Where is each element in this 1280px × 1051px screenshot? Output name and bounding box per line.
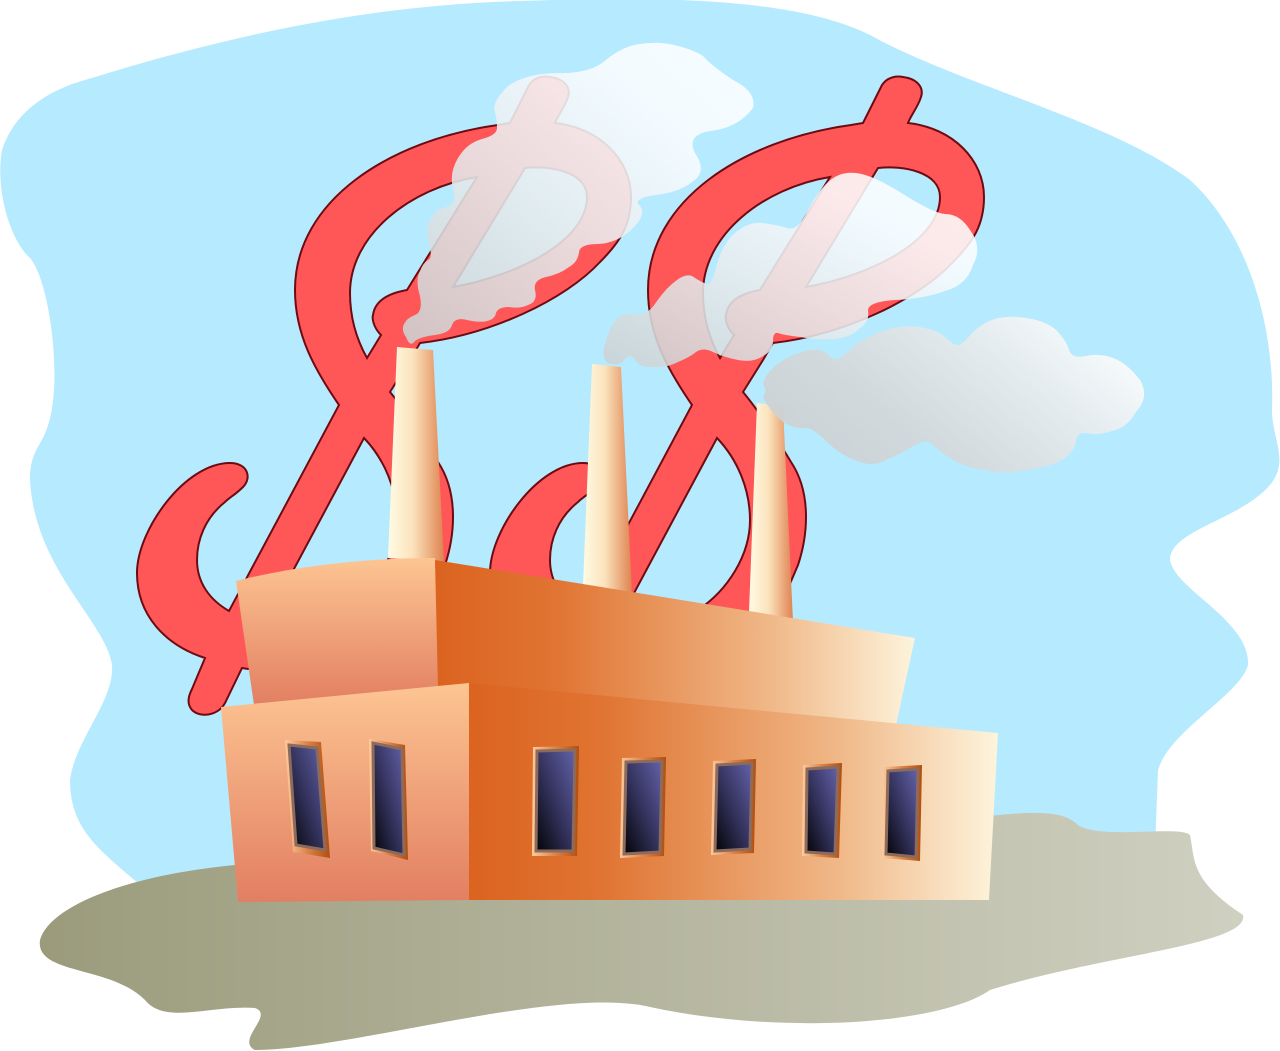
lower block: front	[221, 683, 469, 902]
upper block: front	[236, 558, 440, 705]
dollar sign: left	[137, 77, 631, 715]
smoke cloud: middle	[604, 173, 977, 367]
upper block: side	[435, 560, 915, 725]
ground	[40, 813, 1243, 1050]
dollar sign: right	[490, 77, 984, 715]
smoke cloud: right	[763, 317, 1144, 472]
windows	[285, 739, 922, 861]
lower block: side	[469, 683, 998, 900]
chimney: middle	[583, 364, 632, 594]
chimney: left	[388, 347, 444, 562]
factory	[221, 558, 998, 902]
smoke cloud: top left	[403, 43, 754, 344]
chimney: right	[749, 403, 793, 622]
